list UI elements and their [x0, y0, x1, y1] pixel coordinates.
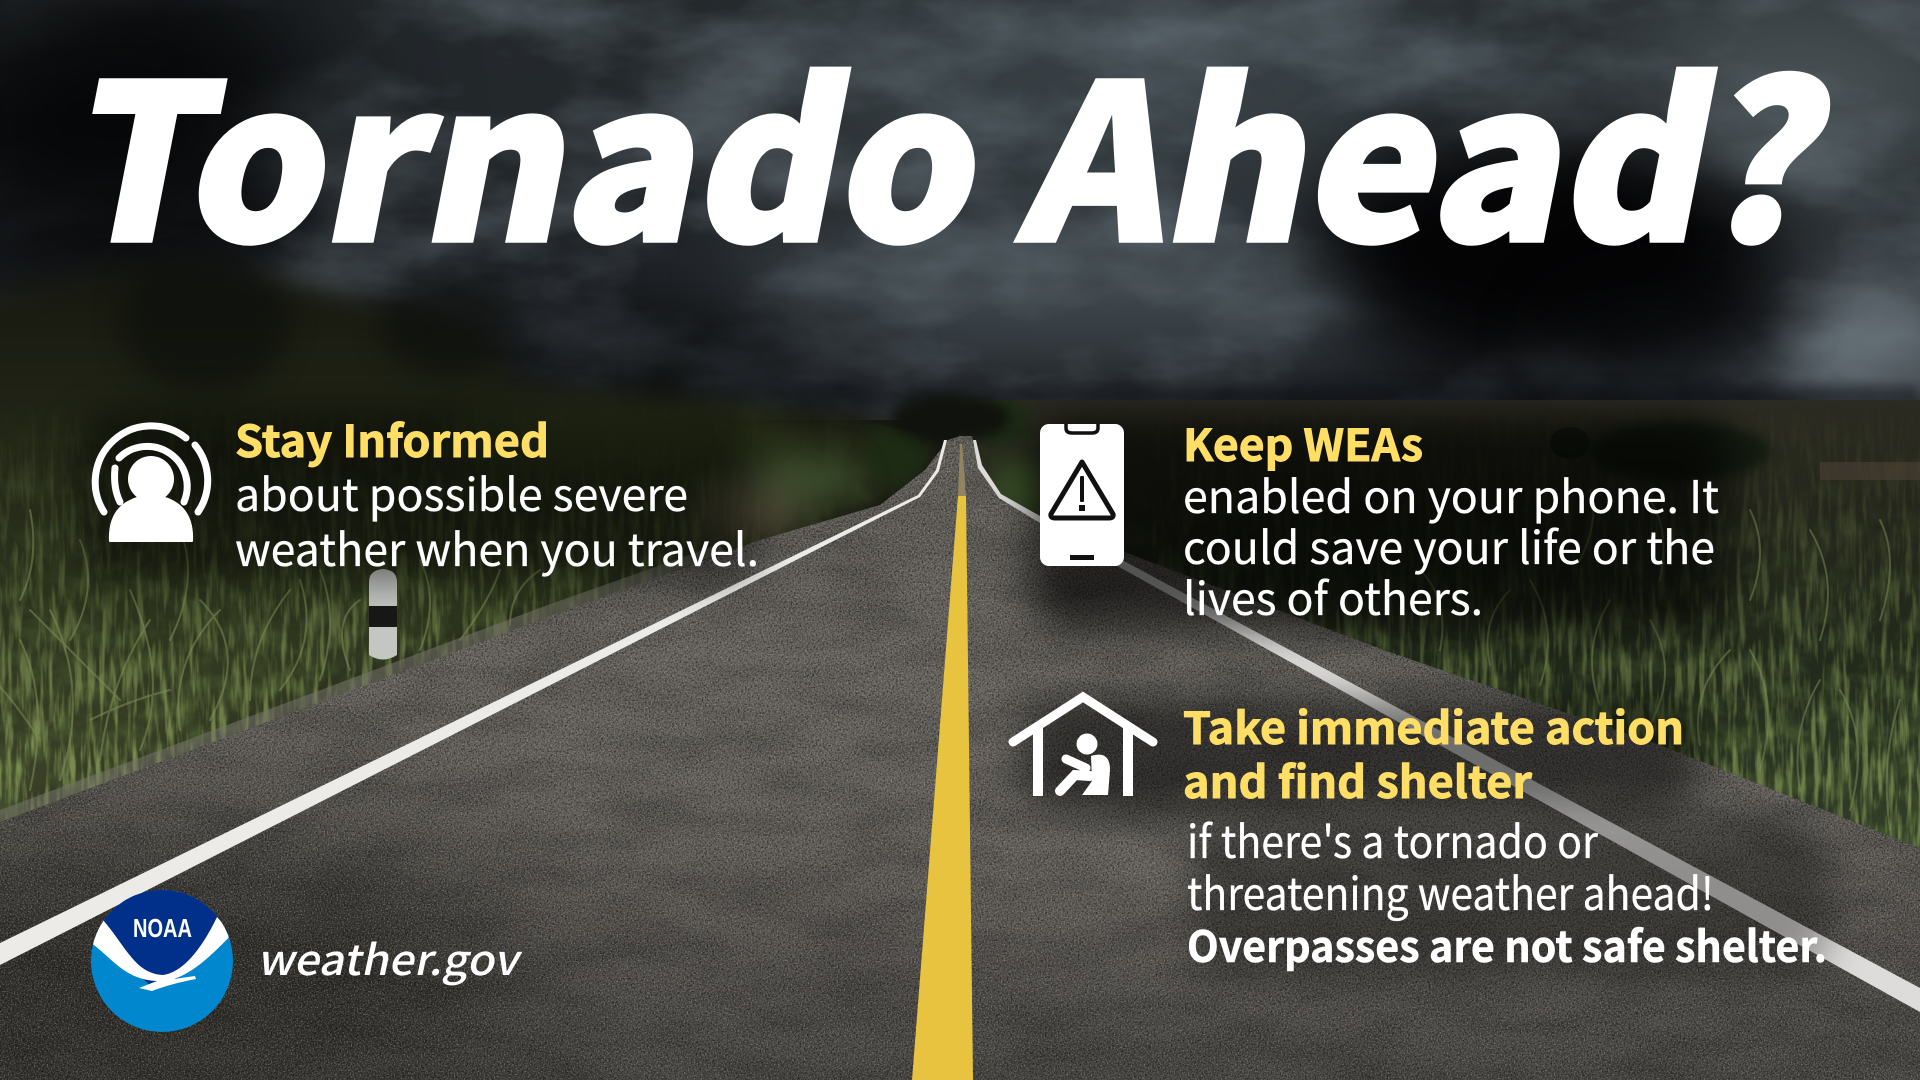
text block: stay informed: weather when you travel.: [235, 514, 759, 579]
text block: take action and find shelter: threatening weather ahead!: [1187, 858, 1714, 923]
text block: stay informed: Stay Informed: [235, 406, 549, 470]
text block: keep WEAs: enabled on your phone. It: [1183, 461, 1719, 526]
road markings: [0, 440, 1920, 1080]
text block: stay informed: [235, 406, 759, 579]
logo: NOAA: [90, 890, 233, 1033]
dark shadow behind left text: [80, 410, 760, 580]
text block: take action and find shelter: and find shelter: [1183, 747, 1533, 811]
dark shadow behind shelter icon and heading: [1020, 700, 1700, 815]
text block: take action and find shelter: Take immediate action: [1183, 693, 1684, 757]
dark shadow behind shelter text: [1190, 820, 1830, 975]
background: left roadside hill and grass: [0, 250, 960, 840]
background: right fields and grass: [890, 394, 1920, 860]
text block: take action and find shelter: [1183, 693, 1827, 975]
dark shadow behind phone text: [1030, 415, 1730, 630]
distant tree line across the road horizon: [890, 394, 1010, 442]
text block: stay informed: about possible severe: [235, 459, 688, 524]
text block: keep WEAs: Keep WEAs: [1183, 410, 1423, 474]
grass blades right: [1420, 490, 1900, 830]
decorative gravel strip omitted from labels: [0, 544, 724, 826]
grass blades left: [0, 510, 540, 790]
text block: keep WEAs: lives of others.: [1183, 563, 1483, 628]
text block: keep WEAs: could save your life or the: [1183, 512, 1715, 577]
distant dark trees: [120, 250, 687, 395]
road surface: [0, 430, 1920, 1080]
text block: take action and find shelter: Overpasses are not safe shelter.: [1187, 913, 1827, 975]
logo: NOAA: NOAA: [133, 913, 192, 943]
text block: take action and find shelter: if there's a tornado or: [1187, 806, 1598, 871]
icon: person sheltering in house: [1013, 697, 1153, 796]
website label: weather.gov: [254, 928, 528, 988]
icon: person with broadcast signal: [95, 426, 208, 541]
icon: phone with warning triangle: [1040, 424, 1124, 566]
text block: keep WEAs: [1183, 410, 1719, 628]
background: storm sky: [0, 0, 1920, 420]
roadside marker post: [369, 569, 397, 660]
